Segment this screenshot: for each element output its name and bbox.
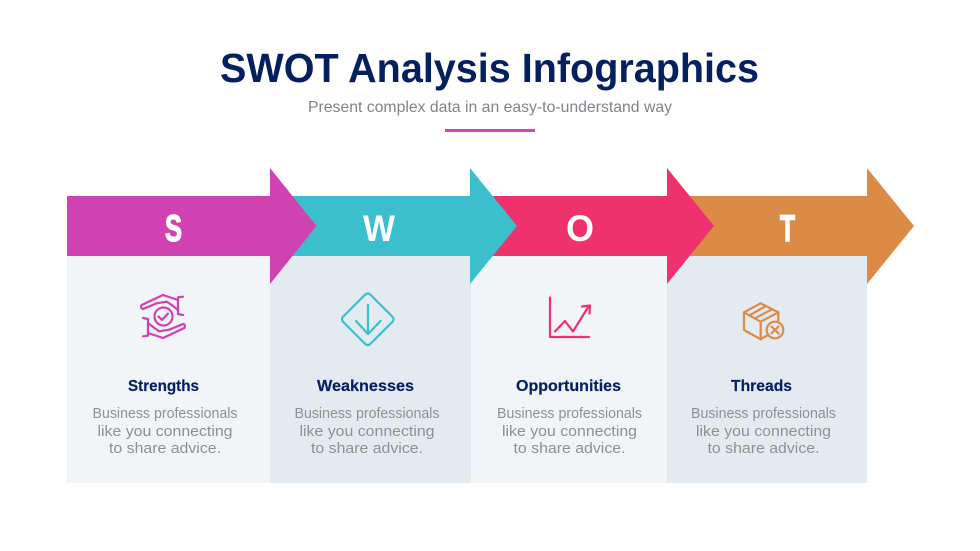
- panel: threads background: [667, 256, 867, 483]
- icon: diamond down arrow: [341, 292, 395, 346]
- title accent underline: [445, 129, 535, 132]
- letter T: T: [780, 208, 795, 249]
- arrow: T: [690, 168, 914, 284]
- arrow: W: [290, 168, 517, 284]
- letter W: W: [363, 208, 395, 249]
- letter S: S: [165, 208, 182, 249]
- text block: threads: [691, 378, 836, 457]
- text block: weaknesses: like you connecting: [300, 424, 434, 440]
- icon: growth chart: [550, 298, 590, 337]
- text block: opportunities: to share advice.: [514, 441, 626, 457]
- subtitle: Present complex data in an easy-to-understand way: [308, 99, 672, 116]
- text block: strengths: like you connecting: [98, 424, 232, 440]
- title: SWOT Analysis Infographics: [220, 45, 759, 91]
- text block: threads: Threads: [731, 378, 792, 395]
- text block: threads: to share advice.: [708, 441, 820, 457]
- text block: weaknesses: to share advice.: [311, 441, 423, 457]
- panel: weaknesses background: [270, 256, 471, 483]
- text block: weaknesses: Business professionals: [294, 406, 440, 422]
- text block: opportunities: Opportunities: [516, 378, 621, 395]
- text block: opportunities: Business professionals: [497, 406, 642, 422]
- text block: threads: like you connecting: [696, 424, 831, 440]
- text block: weaknesses: [294, 378, 440, 457]
- icon: box with cross: [744, 303, 783, 339]
- text block: strengths: Business professionals: [92, 406, 238, 422]
- icon: hands holding check: [141, 295, 185, 338]
- letter O: O: [566, 208, 594, 249]
- text block: weaknesses: Weaknesses: [317, 378, 414, 395]
- text block: strengths: to share advice.: [109, 441, 221, 457]
- text block: threads: Business professionals: [691, 406, 836, 422]
- arrow: S: [67, 168, 316, 284]
- text block: opportunities: like you connecting: [502, 424, 637, 440]
- panel: opportunities background: [471, 256, 667, 483]
- text block: strengths: Strengths: [128, 378, 199, 395]
- panel: strengths background: [67, 256, 270, 483]
- text block: strengths: [92, 378, 238, 457]
- arrow: O: [490, 168, 714, 284]
- text block: opportunities: [497, 378, 642, 457]
